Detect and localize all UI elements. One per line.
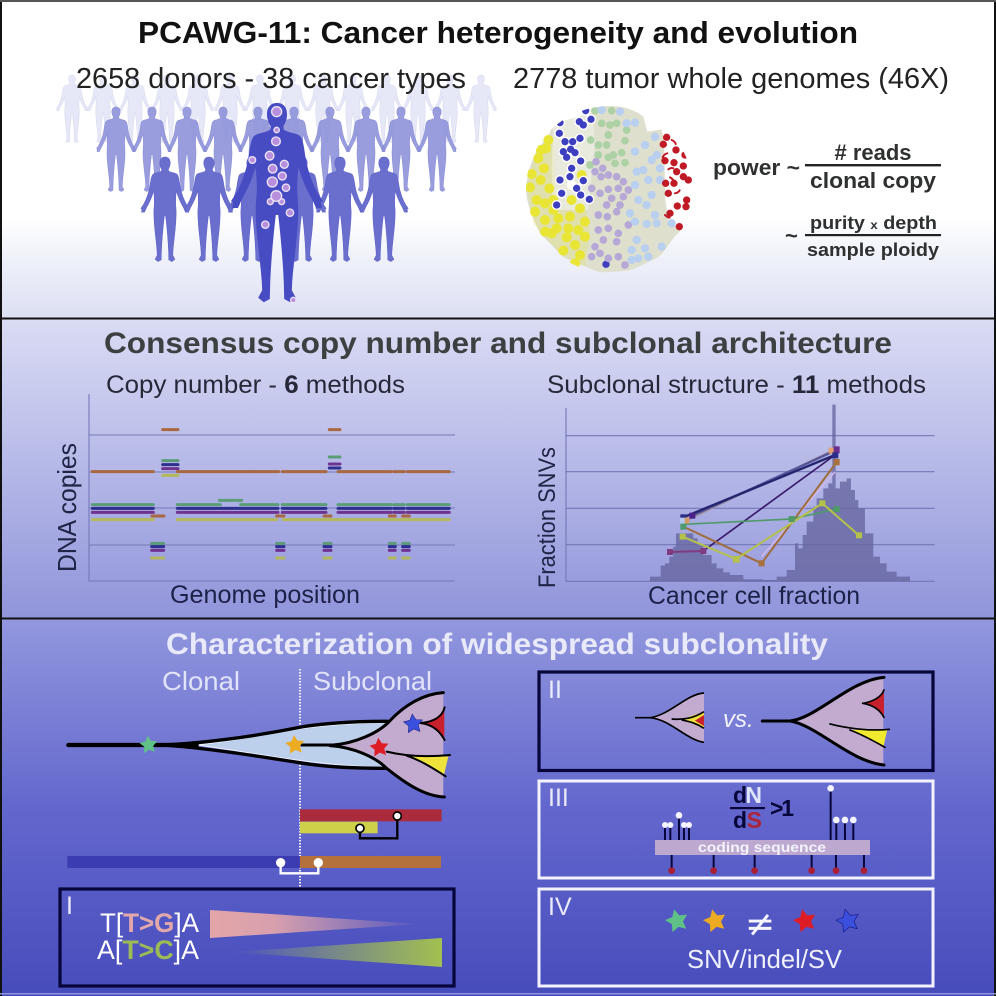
T>G signature label: T[T>G]A [100,908,199,938]
histogram [650,405,910,581]
box III: dN/dS selection [539,781,933,878]
decreasing wedge [210,910,420,938]
chart: DNA copies [89,394,455,581]
top edge line [0,0,996,2]
coding sequence bar [655,839,870,855]
mutation stars [139,713,424,757]
numeral I: I [66,892,73,920]
copy number segments [92,430,449,558]
clonal/subclonal divider [299,669,301,887]
tilde: ~ [785,223,798,248]
stars [663,907,861,933]
subclonal heading: Subclonal structure - 11 methods [547,371,926,399]
small tree [635,693,704,742]
genomes subtitle: 2778 tumor whole genomes (46X) [513,63,949,95]
T>C signature label: A[T>C]A [97,935,199,965]
axes and grid [89,394,455,581]
increasing wedge [232,938,442,967]
box I: mutation signatures [60,889,454,986]
numerator reads: # reads [834,140,912,165]
panel: characterization of widespread subclonality [0,619,996,996]
power label: power ~ [713,155,800,180]
tumor cell circle [526,106,688,273]
numeral II: II [548,676,562,704]
box IV: variant type stars [539,889,933,986]
back row of donors [56,75,497,143]
subclonal label: Subclonal [313,666,432,696]
axes and grid [566,408,935,581]
dN/dS ratio: dS [733,807,762,833]
lollipop mutations [662,785,867,874]
x axis label: Cancer cell fraction [648,582,860,610]
x axis label: Genome position [170,581,360,609]
variant label: SNV/indel/SV [687,944,843,974]
versus label: vs. [723,706,754,733]
tree branches [68,693,450,797]
dN/dS ratio: >1 [770,795,794,821]
numeral III: III [548,784,569,812]
front row of donors [141,157,408,262]
phylogenetic tree [67,693,450,873]
donors subtitle: 2658 donors - 38 cancer types [76,63,466,95]
chart: fraction SNVs [566,405,935,581]
section heading: Consensus copy number and subclonal architecture [104,327,892,360]
large tree [762,677,889,765]
numeral IV: IV [548,893,572,921]
timing bars [67,809,442,868]
coding sequence bar: coding sequence [698,839,826,855]
copy number heading: Copy number - 6 methods [106,371,405,399]
y axis label: Fraction SNVs [534,447,561,588]
y axis label: DNA copies [52,443,82,572]
method lines [670,450,859,563]
power formula [713,140,941,260]
not equal sign: ≠ [745,904,775,945]
numerator purity depth: purity x depth [810,213,937,233]
box II: tree comparison [539,672,933,770]
panel: consensus copy number and subclonal architecture [0,319,996,619]
denominator sample ploidy: sample ploidy [807,240,939,260]
clone shapes [197,693,448,797]
central donor with tumors [231,103,323,303]
method markers [667,446,862,566]
dN/dS ratio [730,782,794,833]
clonal label: Clonal [162,666,240,696]
denominator clonal copy: clonal copy [810,168,937,193]
dN/dS ratio: dN [733,782,762,808]
title: PCAWG-11: Cancer heterogeneity and evolution [138,15,858,50]
section heading: Characterization of widespread subclonality [166,628,828,661]
timing connectors [276,812,401,873]
donor figures [56,15,949,303]
bottom edge line [0,993,996,994]
middle row of donors [96,107,457,192]
